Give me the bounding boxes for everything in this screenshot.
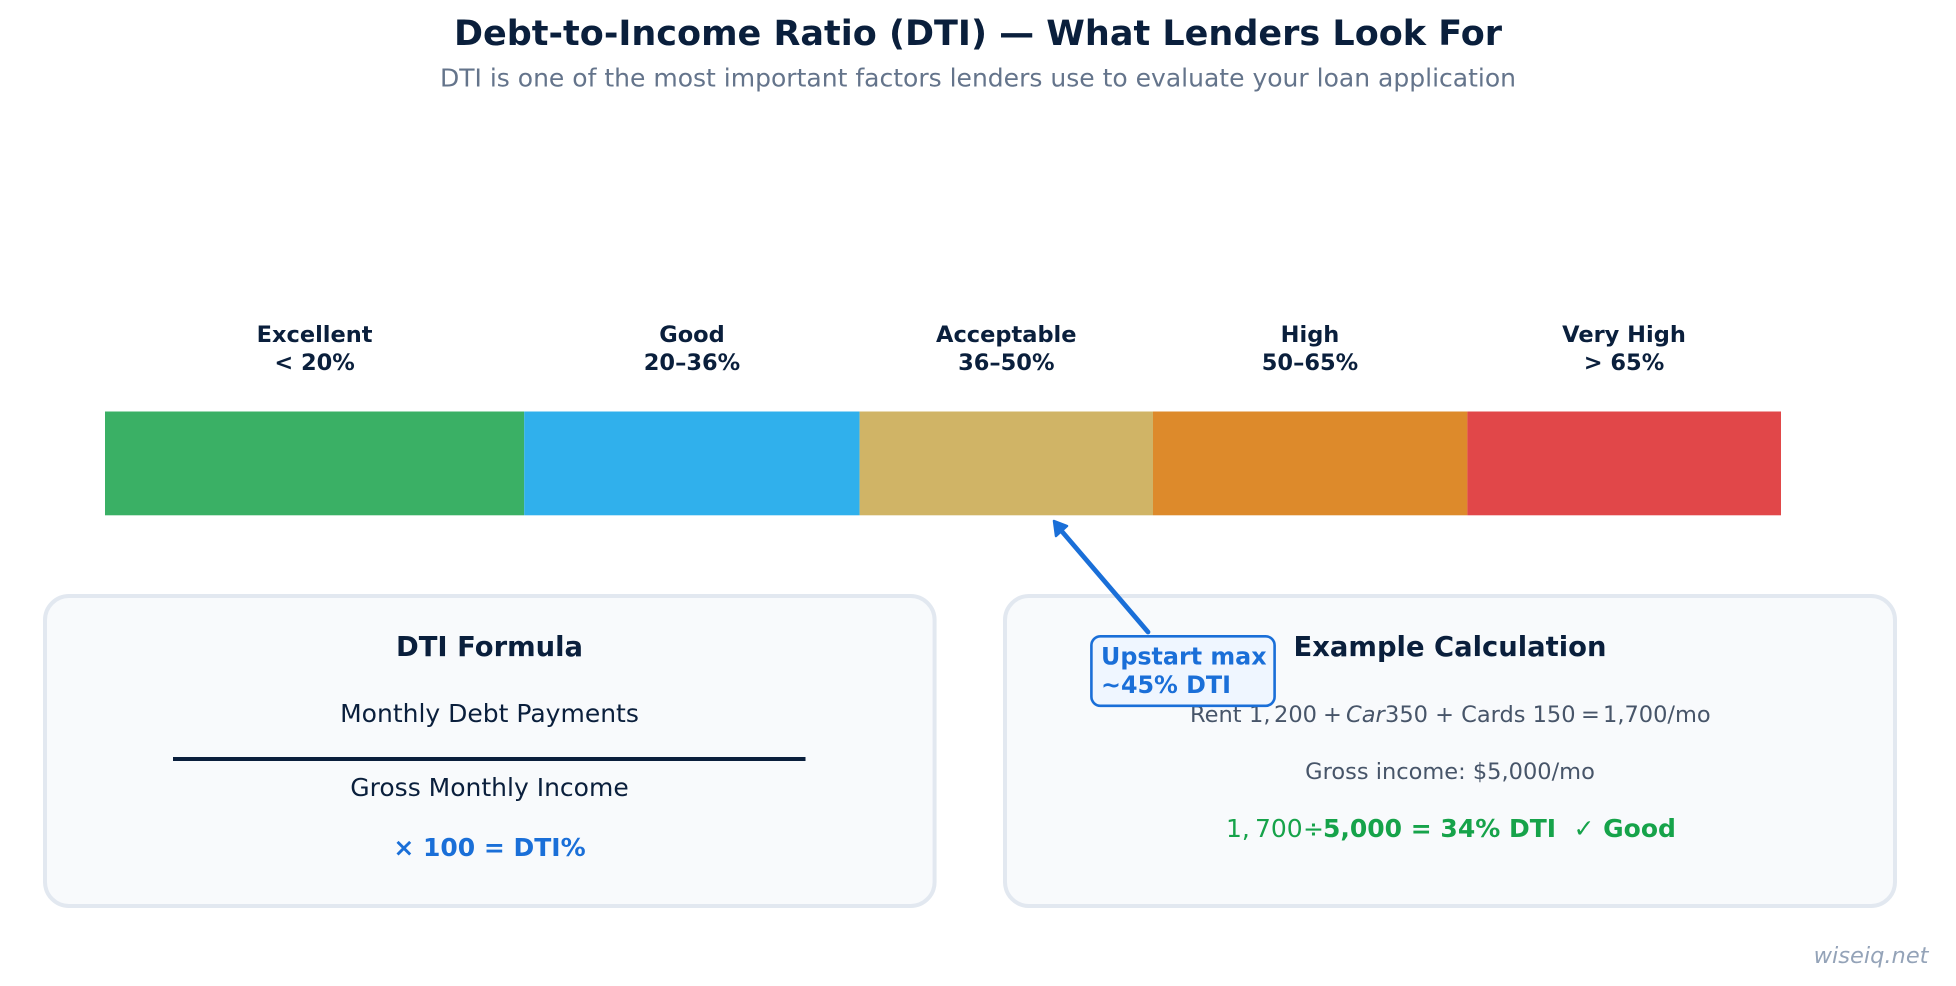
title: Debt-to-Income Ratio (DTI) — What Lenders Look For <box>454 14 1503 54</box>
label: good: 20–36% <box>644 350 740 376</box>
debts sum: 1, <box>1249 702 1270 728</box>
watermark: wiseiq.net <box>1814 943 1930 969</box>
label: good: Good <box>659 322 725 348</box>
multiplier: × 100 = DTI% <box>393 833 586 862</box>
debts sum: 1,700/mo <box>1603 702 1711 728</box>
arrow to Upstart max <box>1054 521 1148 632</box>
band: high <box>1153 412 1467 515</box>
band: good <box>524 412 860 515</box>
panel: DTI formula <box>45 596 935 906</box>
subtitle: DTI is one of the most important factors lenders use to evaluate your loan application <box>440 64 1516 92</box>
heading: example calculation: Example Calculation <box>1294 632 1606 663</box>
debts sum: 200 <box>1274 702 1317 728</box>
result: 1, <box>1226 814 1250 843</box>
debts sum: = <box>1581 702 1600 728</box>
heading: DTI formula: DTI Formula <box>396 632 583 663</box>
label: excellent: < 20% <box>274 350 355 376</box>
band: excellent <box>105 412 524 515</box>
callout: Upstart max: ~45% DTI <box>1101 671 1231 699</box>
scale bar: DTI bands <box>105 412 1781 515</box>
label: acceptable: 36–50% <box>958 350 1055 376</box>
callout: Upstart max: Upstart max <box>1101 642 1267 670</box>
debts sum: + <box>1323 702 1342 728</box>
label: high: High <box>1281 322 1339 348</box>
band: very high <box>1467 412 1781 515</box>
panel: example calculation <box>1005 596 1895 906</box>
label: acceptable: Acceptable <box>936 322 1077 348</box>
debts sum: 350 + Cards 150 <box>1385 702 1576 728</box>
label: very high: > 65% <box>1584 350 1664 376</box>
numerator: Monthly Debt Payments <box>340 699 639 728</box>
callout: Upstart max <box>1091 636 1275 706</box>
denominator: Gross Monthly Income <box>350 773 629 802</box>
result: 5,000 = 34% DTI ✓ Good <box>1323 814 1676 843</box>
result: ÷ <box>1303 814 1324 843</box>
result: 700 <box>1255 814 1303 843</box>
fraction line <box>173 757 806 761</box>
debts sum: Rent <box>1190 702 1249 728</box>
label: excellent: Excellent <box>257 322 373 348</box>
label: high: 50–65% <box>1262 350 1358 376</box>
debts sum: Car <box>1346 702 1386 728</box>
label: very high: Very High <box>1562 322 1686 348</box>
band: acceptable <box>860 412 1153 515</box>
gross income: Gross income: $5,000/mo <box>1305 759 1595 785</box>
